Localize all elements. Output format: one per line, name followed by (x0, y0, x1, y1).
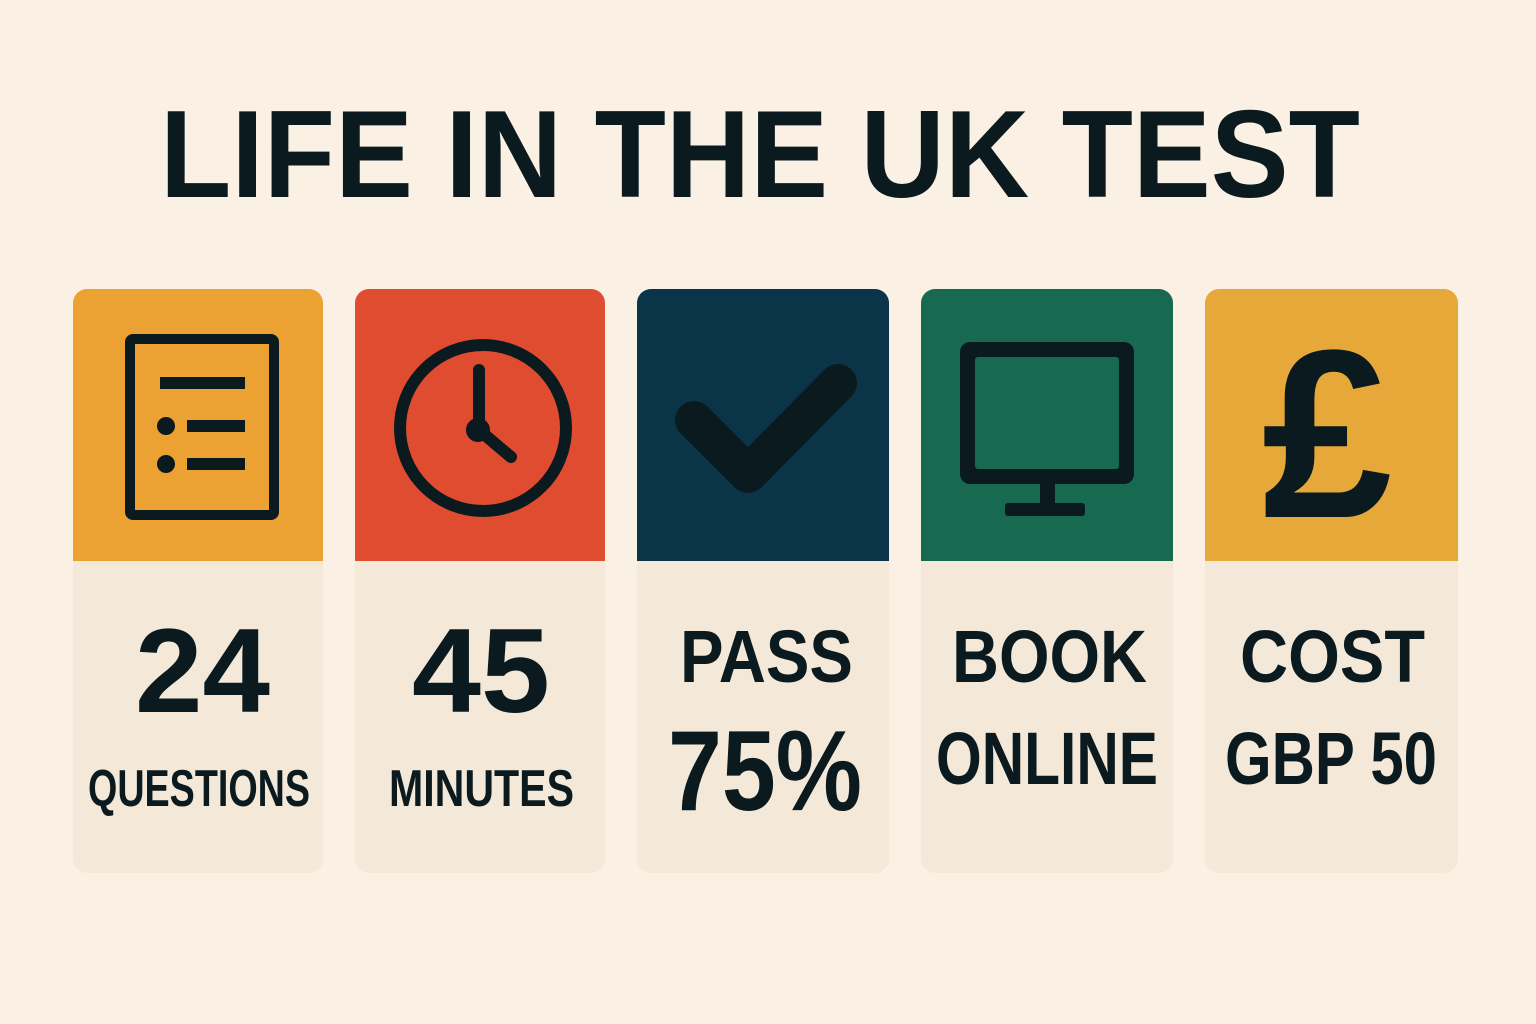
icon: monitor (960, 342, 1134, 516)
text: book online: BOOK (952, 615, 1147, 698)
text: 45 minutes: MINUTES (389, 760, 574, 818)
text: 24 questions: 24 (135, 604, 270, 738)
panel: minutes (355, 289, 605, 873)
title: LIFE IN THE UK TEST (160, 86, 1360, 224)
text: cost gbp 50: COST (1240, 615, 1425, 698)
icon: checkmark (694, 383, 838, 474)
text: book online: ONLINE (936, 717, 1158, 800)
text: 45 minutes (389, 604, 574, 818)
text: book online (936, 615, 1158, 800)
text: pass 75%: 75% (668, 708, 862, 835)
text: pass 75% (668, 615, 862, 835)
text: 45 minutes: 45 (412, 604, 550, 738)
panel: cost (1205, 289, 1458, 873)
icon: clock (400, 345, 566, 511)
panel: questions (73, 289, 323, 873)
icon: pound sign: £ (1262, 300, 1392, 568)
text: cost gbp 50: GBP 50 (1225, 717, 1437, 800)
panel: book online (921, 289, 1173, 873)
text: 24 questions (88, 604, 310, 818)
icon: document list (130, 339, 274, 515)
text: cost gbp 50 (1225, 615, 1437, 800)
text: pass 75%: PASS (680, 615, 853, 698)
text: 24 questions: QUESTIONS (88, 760, 310, 818)
panel: pass mark (637, 289, 889, 873)
